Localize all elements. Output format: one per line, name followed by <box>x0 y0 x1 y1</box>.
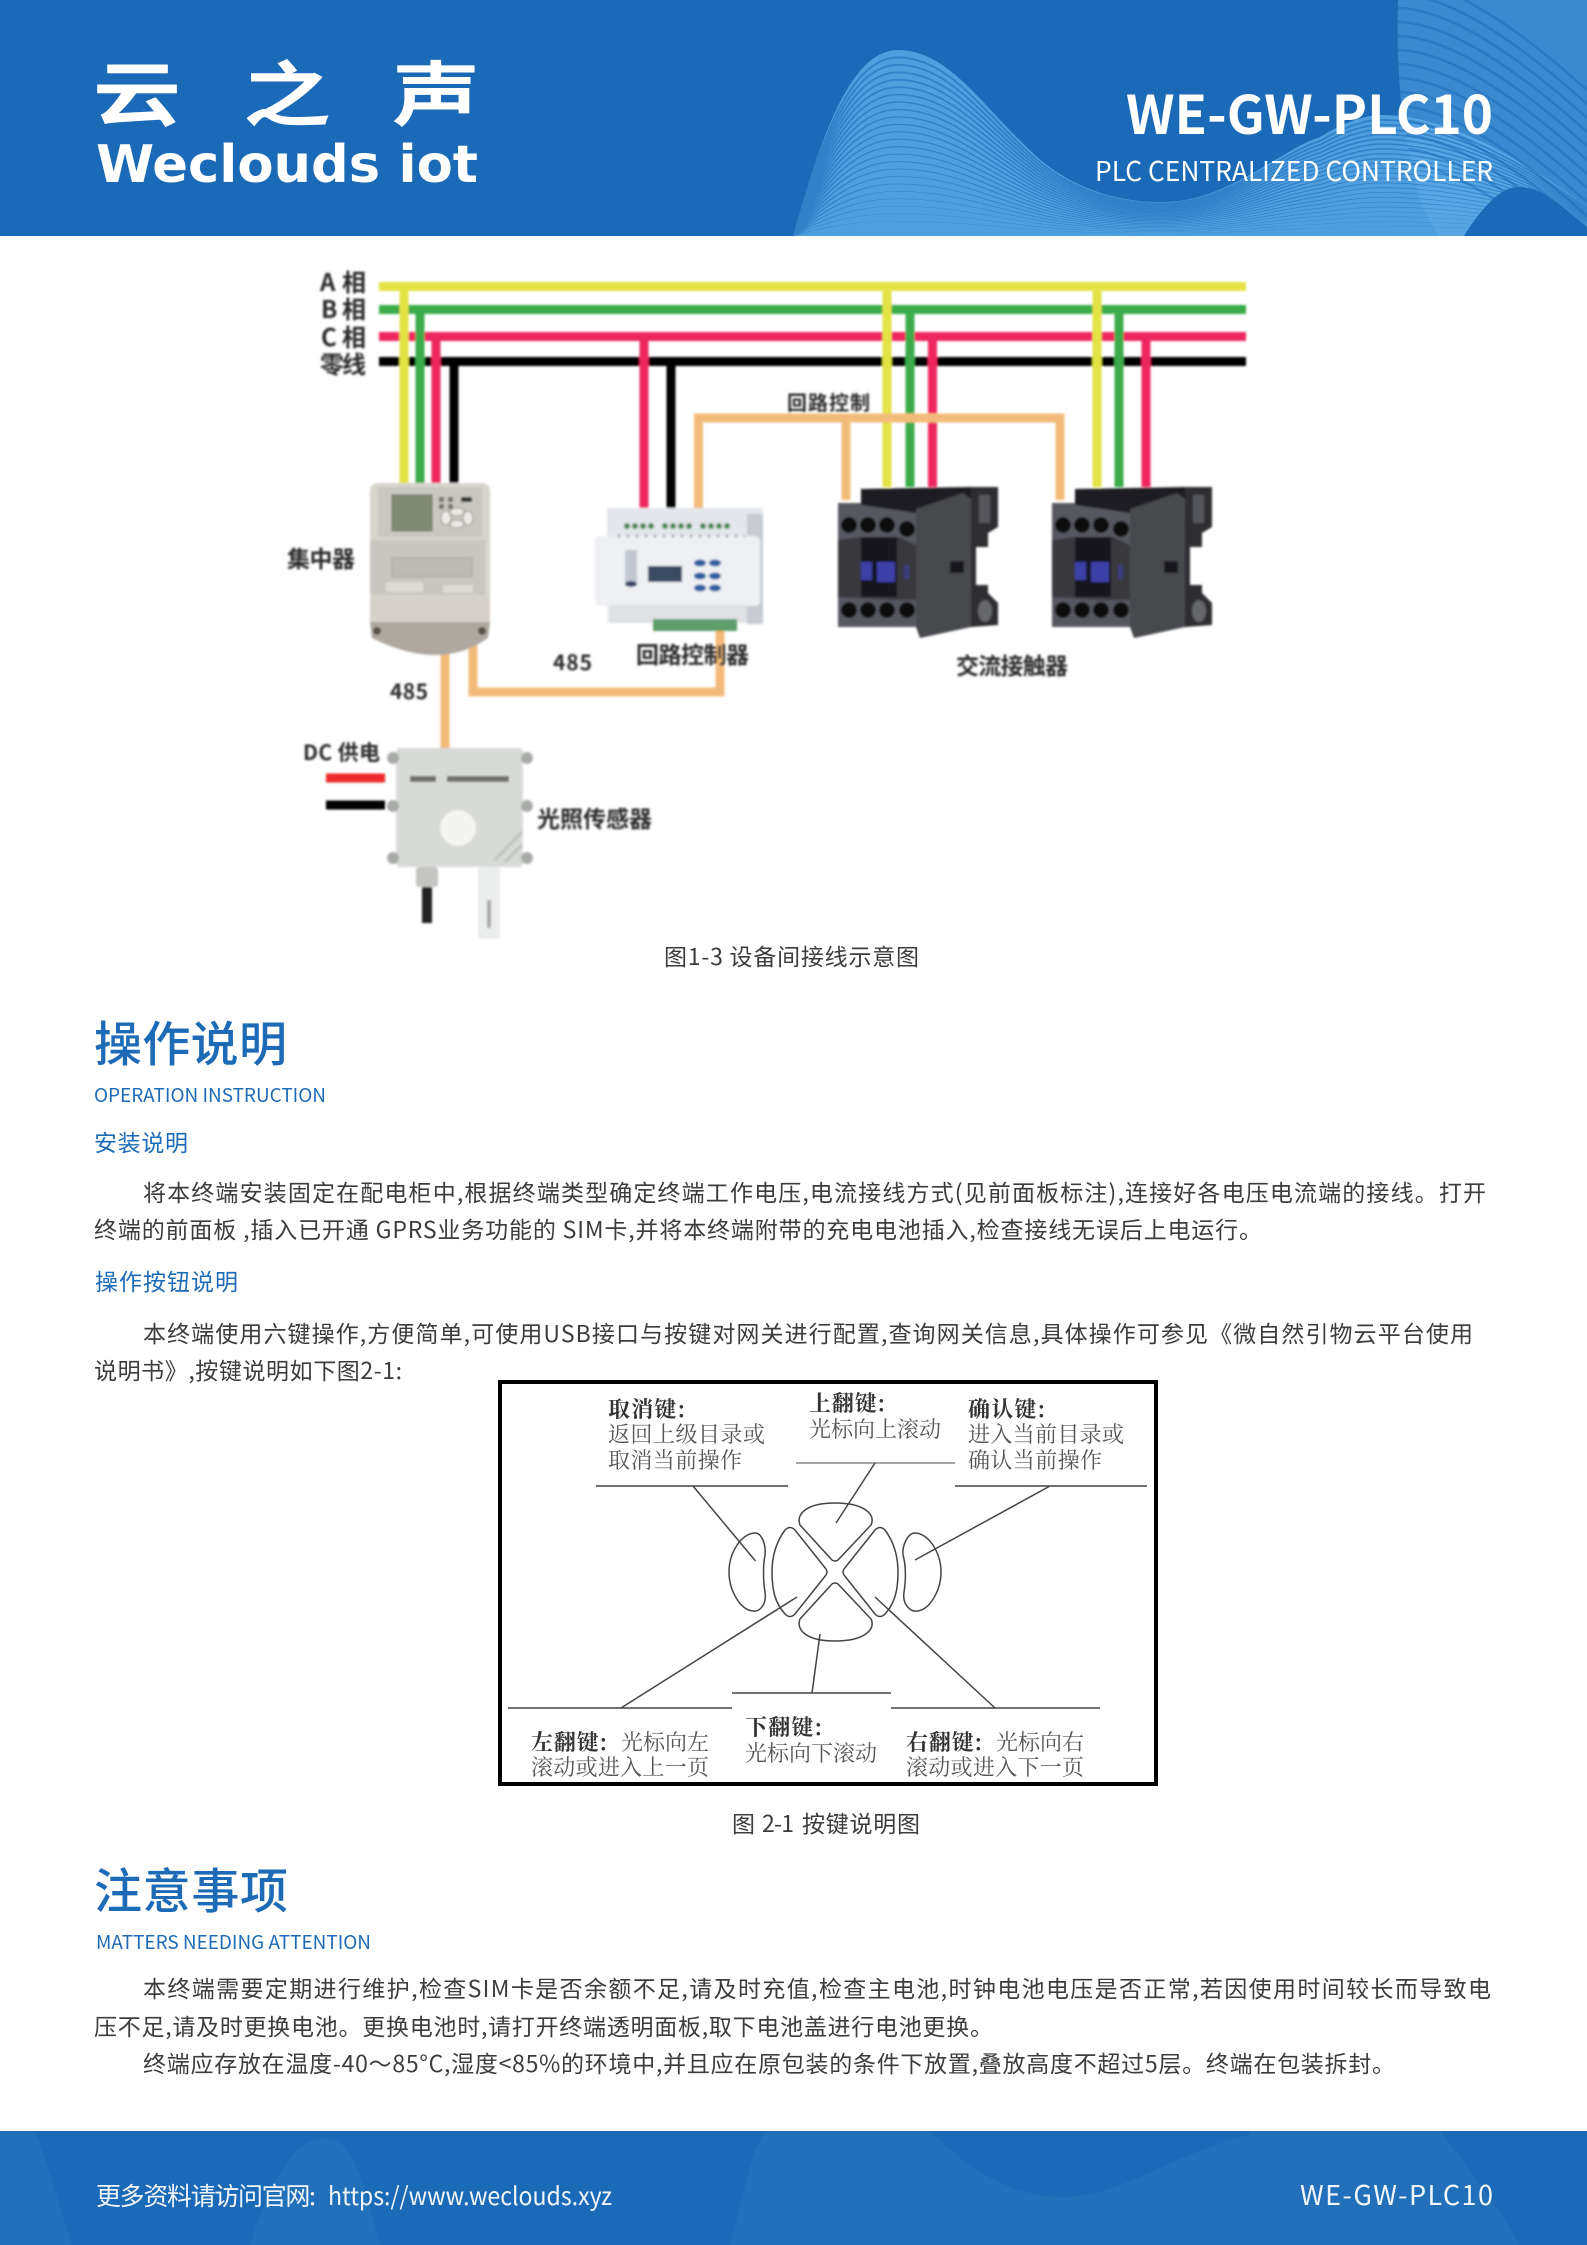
right key text: 光标向右 <box>996 1726 1084 1757</box>
485 label left: 485 <box>390 676 428 706</box>
decorative wave <box>793 0 1587 236</box>
contactor 1 <box>838 487 998 638</box>
right key text: 滚动或进入下一页 <box>906 1751 1084 1782</box>
left key text <box>531 1726 709 1782</box>
up key text <box>809 1387 941 1444</box>
concentrator device <box>370 483 490 655</box>
bus labels: 零线 <box>320 345 366 380</box>
logo: Weclouds iot <box>96 135 478 195</box>
up key text: 光标向上滚动 <box>809 1413 941 1444</box>
buttons paragraph <box>94 1315 1473 1386</box>
install paragraph: 将本终端安装固定在配电柜中,根据终端类型确定终端工作电压,电流接线方式(见前面板标注),连接好各电压电流端的接线。打开 <box>143 1174 1486 1208</box>
concentrator label: 集中器 <box>287 540 355 574</box>
confirm key text: 确认当前操作 <box>968 1444 1102 1475</box>
bus labels <box>319 263 366 380</box>
DC supply wires <box>326 774 385 810</box>
right key text: 右翻键: <box>906 1726 982 1757</box>
contactor 2 <box>1052 487 1212 638</box>
logo: 之 <box>243 39 331 140</box>
cancel key text: 返回上级目录或 <box>608 1418 765 1449</box>
footer website <box>96 2177 612 2213</box>
up key text: 上翻键: <box>809 1387 885 1418</box>
cancel key text: 取消当前操作 <box>608 1444 742 1475</box>
footer website: 更多资料请访问官网: <box>96 2177 316 2213</box>
install paragraph: 终端的前面板 ,插入已开通 GPRS业务功能的 SIM卡,并将本终端附带的充电电池插入,检查接线无误后上电运行。 <box>94 1211 1262 1245</box>
button diagram <box>500 1382 1156 1784</box>
attention paragraph: 终端应存放在温度-40～85°C,湿度<85%的环境中,并且应在原包装的条件下放置,叠放高度不超过5层。终端在包装拆封。 <box>143 2045 1395 2079</box>
footer model: WE-GW-PLC10 <box>1300 2174 1493 2213</box>
figure caption 2-1: 2-1 <box>762 1805 794 1839</box>
down key text <box>745 1711 877 1768</box>
buttons paragraph: 说明书》,按键说明如下图2-1: <box>94 1352 402 1386</box>
loop controller label: 回路控制器 <box>636 636 749 670</box>
key outlines <box>729 1503 941 1641</box>
subheading: install: 安装说明 <box>94 1124 188 1158</box>
attention paragraph: 本终端需要定期进行维护,检查SIM卡是否余额不足,请及时充值,检查主电池,时钟电池电压是否正常,若因使用时间较长而导致电 <box>143 1970 1491 2004</box>
phase bus lines <box>379 282 1246 366</box>
light sensor label: 光照传感器 <box>537 800 652 834</box>
footer website: https://www.weclouds.xyz <box>328 2177 612 2213</box>
confirm key text: 确认键: <box>968 1393 1045 1424</box>
cancel key text: 取消键: <box>608 1393 685 1424</box>
down key text: 光标向下滚动 <box>745 1737 877 1768</box>
485 label right: 485 <box>553 647 592 677</box>
header banner <box>0 0 1587 236</box>
product subtitle: PLC CENTRALIZED CONTROLLER <box>1095 150 1493 189</box>
bus labels: B 相 <box>321 290 366 325</box>
figure caption 2-1 <box>732 1805 920 1839</box>
buttons paragraph: 本终端使用六键操作,方便简单,可使用USB接口与按键对网关进行配置,查询网关信息,具体操作可参见《微自然引物云平台使用 <box>143 1315 1473 1349</box>
light sensor device <box>387 748 533 939</box>
DC supply label: DC 供电 <box>303 737 380 767</box>
bus labels: C 相 <box>321 318 366 353</box>
cancel key text <box>608 1393 765 1475</box>
logo: 声 <box>392 39 480 140</box>
callout rules <box>508 1463 1147 1708</box>
section subtitle: attention: MATTERS NEEDING ATTENTION <box>96 1928 371 1955</box>
section heading: attention: 注意事项 <box>94 1852 288 1922</box>
loop controller device <box>595 508 763 631</box>
loop control label: 回路控制 <box>787 387 870 416</box>
footer banner <box>0 2131 1587 2245</box>
left key text: 滚动或进入上一页 <box>531 1751 709 1782</box>
section heading: operation: 操作说明 <box>94 1005 287 1075</box>
loop control wiring <box>698 418 1060 508</box>
logo: 云 <box>93 39 181 140</box>
figure caption 2-1: 图 <box>732 1805 755 1839</box>
wiring diagram <box>287 263 1246 939</box>
confirm key text: 进入当前目录或 <box>968 1418 1124 1449</box>
confirm key text <box>968 1393 1124 1475</box>
logo <box>93 39 480 195</box>
bus labels: A 相 <box>319 263 366 298</box>
footer wave pattern <box>0 2131 1520 2245</box>
drop wires <box>400 287 1150 508</box>
attention paragraph <box>94 1970 1491 2079</box>
figure caption 2-1: 按键说明图 <box>802 1805 920 1839</box>
attention paragraph: 压不足,请及时更换电池。更换电池时,请打开终端透明面板,取下电池盖进行电池更换。 <box>94 2008 993 2042</box>
install paragraph <box>94 1174 1486 1245</box>
product model: WE-GW-PLC10 <box>1126 74 1493 150</box>
485 wiring <box>445 630 720 748</box>
contactor label: 交流接触器 <box>956 647 1068 681</box>
subheading: buttons: 操作按钮说明 <box>95 1263 238 1297</box>
section subtitle: operation: OPERATION INSTRUCTION <box>94 1081 326 1108</box>
left key text: 左翻键: <box>531 1726 607 1757</box>
down key text: 下翻键: <box>745 1711 822 1742</box>
figure caption 1-3: 图1-3 设备间接线示意图 <box>664 938 919 972</box>
right key text <box>906 1726 1084 1782</box>
left key text: 光标向左 <box>621 1726 709 1757</box>
